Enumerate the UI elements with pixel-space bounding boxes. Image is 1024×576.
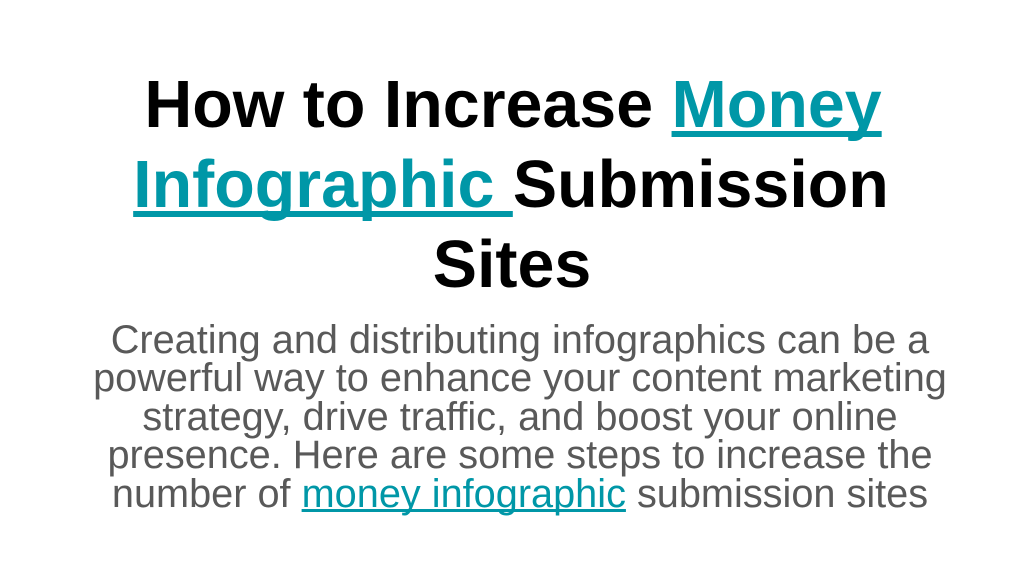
- body paragraph: number of money infographic submission sites: [112, 472, 928, 516]
- body paragraph: Creating and distributing infographics can be a: [111, 318, 929, 362]
- title: Sites: [433, 228, 591, 302]
- body paragraph: [93, 318, 947, 516]
- title: How to Increase Money: [144, 68, 882, 142]
- title: Infographic Submission: [133, 148, 889, 222]
- body paragraph: powerful way to enhance your content marketing: [93, 356, 947, 400]
- title: [133, 68, 889, 302]
- body paragraph: strategy, drive traffic, and boost your online: [142, 395, 898, 439]
- body paragraph: presence. Here are some steps to increase the: [107, 433, 933, 477]
